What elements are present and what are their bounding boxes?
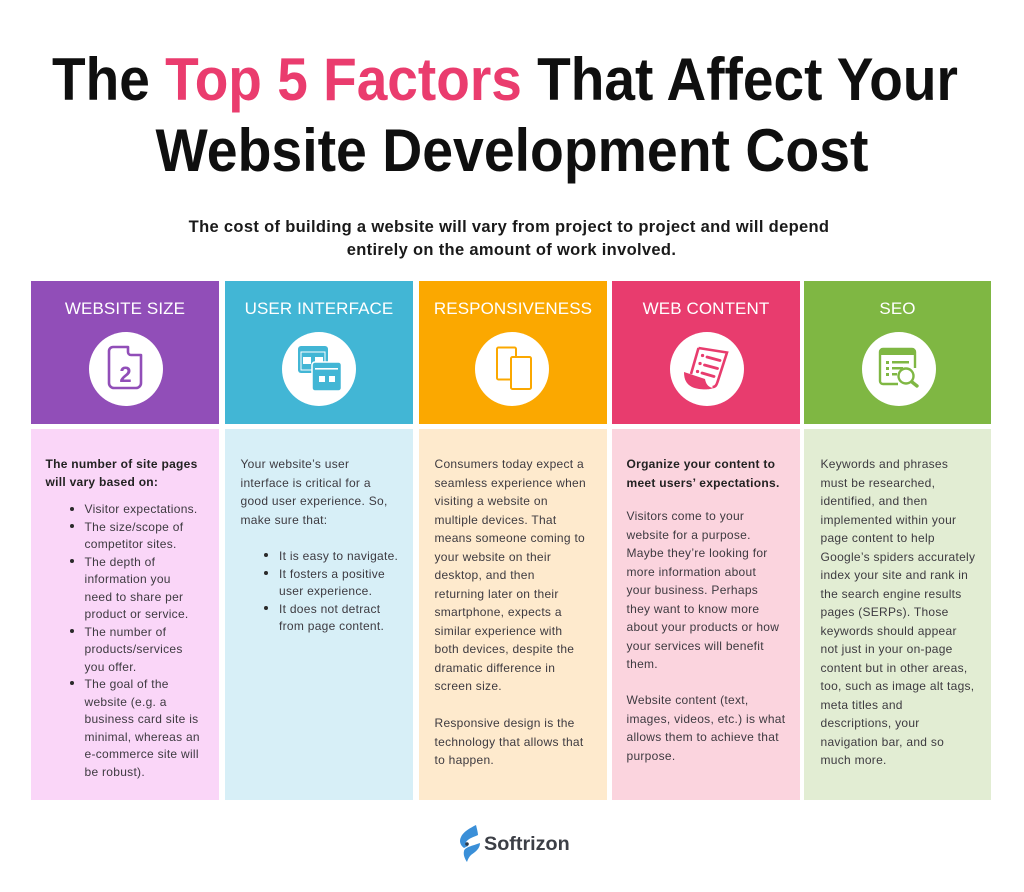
panel: website size details: minimal, whereas an bbox=[84, 730, 200, 744]
wordmark: Softrizon bbox=[484, 833, 570, 855]
panel: website size details: e-commerce site will bbox=[84, 747, 199, 761]
panel: responsiveness details: both devices, despite the bbox=[434, 642, 574, 656]
subtitle bbox=[188, 218, 829, 259]
panel: website size details: competitor sites. bbox=[84, 537, 177, 551]
panel: seo details: implemented within your bbox=[820, 512, 956, 526]
panel: website size details: information you bbox=[84, 572, 171, 586]
panel: website size details: business card site is bbox=[84, 712, 198, 726]
panel: responsiveness details: multiple devices. That bbox=[434, 512, 556, 526]
panel: seo details: index your site and rank in bbox=[820, 568, 968, 582]
title: The Top 5 Factors That Affect Your bbox=[52, 46, 958, 113]
panel header: web content: WEB CONTENT bbox=[643, 299, 769, 318]
panel: user interface details bbox=[225, 429, 413, 800]
panel: seo details: the search engine results bbox=[820, 586, 962, 600]
panel: user interface details: It does not detract bbox=[279, 602, 380, 616]
icon: document scroll bbox=[670, 332, 744, 406]
subtitle: entirely on the amount of work involved. bbox=[347, 241, 676, 259]
panel: responsiveness details: dramatic difference in bbox=[434, 660, 555, 674]
panel: responsiveness details: your website on their bbox=[434, 550, 551, 564]
panel: web content details: Maybe they’re looking for bbox=[626, 546, 768, 560]
panel: web content details: images, videos, etc.) is what bbox=[626, 712, 785, 726]
panel: web content details: more information about bbox=[626, 564, 756, 578]
icon: search results bbox=[862, 332, 936, 406]
panel: seo details: identified, and then bbox=[820, 494, 928, 508]
panel: seo details: page content to help bbox=[820, 531, 935, 545]
panel: website size details: The number of bbox=[84, 624, 166, 638]
panel: seo details: descriptions, your bbox=[820, 716, 920, 730]
panel: website size details: products/services bbox=[84, 642, 183, 656]
panel: seo details bbox=[804, 429, 991, 800]
panel: website size details: will vary based on: bbox=[46, 475, 158, 489]
panel: website size details: The goal of the bbox=[84, 677, 169, 691]
panel: website size details: you offer. bbox=[84, 660, 136, 674]
panel: seo details: content but in other areas, bbox=[820, 660, 967, 674]
panel: responsiveness details: screen size. bbox=[434, 679, 502, 693]
panel: responsiveness details: technology that allows that bbox=[434, 734, 583, 748]
panel: web content details: Visitors come to your bbox=[626, 509, 744, 523]
panel: user interface details: It is easy to navigate. bbox=[279, 549, 398, 563]
panel header: responsiveness bbox=[419, 281, 607, 424]
panel: seo details: not just in your on-page bbox=[820, 642, 953, 656]
panel: responsiveness details: similar experience with bbox=[434, 624, 562, 638]
panel: website size details: be robust). bbox=[84, 764, 145, 778]
panel: responsiveness details: Consumers today expect a bbox=[434, 457, 584, 471]
panel: web content details: your services will benefit bbox=[626, 638, 764, 652]
logo: Softrizon bbox=[460, 825, 570, 862]
panel: web content details: they want to know more bbox=[626, 602, 759, 616]
panel: responsiveness details bbox=[419, 429, 607, 800]
panel header: website size: WEBSITE SIZE bbox=[65, 299, 185, 318]
panel: website size details: product or service. bbox=[84, 607, 189, 621]
panel: responsiveness details: Responsive design is the bbox=[434, 716, 575, 730]
icon: devices bbox=[475, 332, 549, 406]
panel: seo details: meta titles and bbox=[820, 698, 903, 712]
panel: web content details: Organize your content to bbox=[626, 457, 775, 471]
panel: user interface details: Your website’s user bbox=[240, 457, 349, 471]
panel: seo details: too, such as image alt tags, bbox=[820, 679, 974, 693]
panel: seo details: pages (SERPs). Those bbox=[820, 605, 949, 619]
panel: web content details: meet users’ expectations. bbox=[626, 476, 780, 490]
panel: responsiveness details: desktop, and then bbox=[434, 568, 535, 582]
panel: user interface details: from page content. bbox=[279, 619, 384, 633]
subtitle: The cost of building a website will vary from project to project and will depend bbox=[189, 218, 829, 236]
panel: website size details: Visitor expectations. bbox=[84, 502, 198, 516]
title: Website Development Cost bbox=[155, 117, 868, 184]
panel: web content details: allows them to achieve that bbox=[626, 730, 779, 744]
panel: website size details: The depth of bbox=[84, 554, 155, 568]
panel header: user interface bbox=[225, 281, 413, 424]
panel header: user interface: USER INTERFACE bbox=[245, 299, 393, 318]
panel: user interface details: good user experience. So, bbox=[240, 494, 388, 508]
panel: web content details bbox=[612, 429, 800, 800]
panel: web content details: your business. Perhaps bbox=[626, 583, 758, 597]
panel: responsiveness details: to happen. bbox=[434, 753, 494, 767]
panel: web content details: them. bbox=[626, 657, 658, 671]
panel header: web content bbox=[612, 281, 800, 424]
panel: responsiveness details: visiting a website on bbox=[434, 494, 548, 508]
panel: seo details: must be researched, bbox=[820, 476, 935, 490]
panel: website size details: The number of site pages bbox=[46, 457, 198, 471]
panel: user interface details: It fosters a positive bbox=[279, 566, 385, 580]
panel: responsiveness details: means someone coming to bbox=[434, 531, 585, 545]
panel: user interface details: user experience. bbox=[279, 584, 372, 598]
panel header: seo bbox=[804, 281, 991, 424]
panel: seo details: keywords should appear bbox=[820, 624, 957, 638]
panel: user interface details: interface is critical for a bbox=[240, 476, 371, 490]
panel: web content details: purpose. bbox=[626, 748, 675, 762]
icon: numbered page: 2 bbox=[119, 362, 132, 387]
panel: web content details: website for a purpose. bbox=[626, 528, 751, 542]
icon: logo mark bbox=[460, 825, 480, 862]
panel: website size details: The size/scope of bbox=[84, 520, 183, 534]
panel: user interface details: make sure that: bbox=[240, 512, 327, 526]
panel: web content details: Website content (text, bbox=[626, 693, 748, 707]
panel: seo details: much more. bbox=[820, 753, 887, 767]
panel: website size details: need to share per bbox=[84, 590, 183, 604]
panel: website size details: website (e.g. a bbox=[84, 694, 167, 708]
panel: responsiveness details: seamless experience when bbox=[434, 476, 586, 490]
panel: web content details: about your products or how bbox=[626, 620, 779, 634]
panel: responsiveness details: smartphone, expects a bbox=[434, 605, 562, 619]
panel: seo details: Google’s spiders accurately bbox=[820, 550, 975, 564]
panel header: responsiveness: RESPONSIVENESS bbox=[434, 299, 592, 318]
icon: numbered page bbox=[89, 332, 163, 406]
panel header: seo: SEO bbox=[879, 299, 916, 318]
title bbox=[52, 46, 958, 184]
panel: website size details bbox=[31, 429, 219, 800]
panel: seo details: Keywords and phrases bbox=[820, 457, 948, 471]
panel: responsiveness details: returning later on their bbox=[434, 586, 559, 600]
panel: seo details: navigation bar, and so bbox=[820, 734, 944, 748]
panel header: website size bbox=[31, 281, 219, 424]
icon: interface windows bbox=[282, 332, 356, 406]
